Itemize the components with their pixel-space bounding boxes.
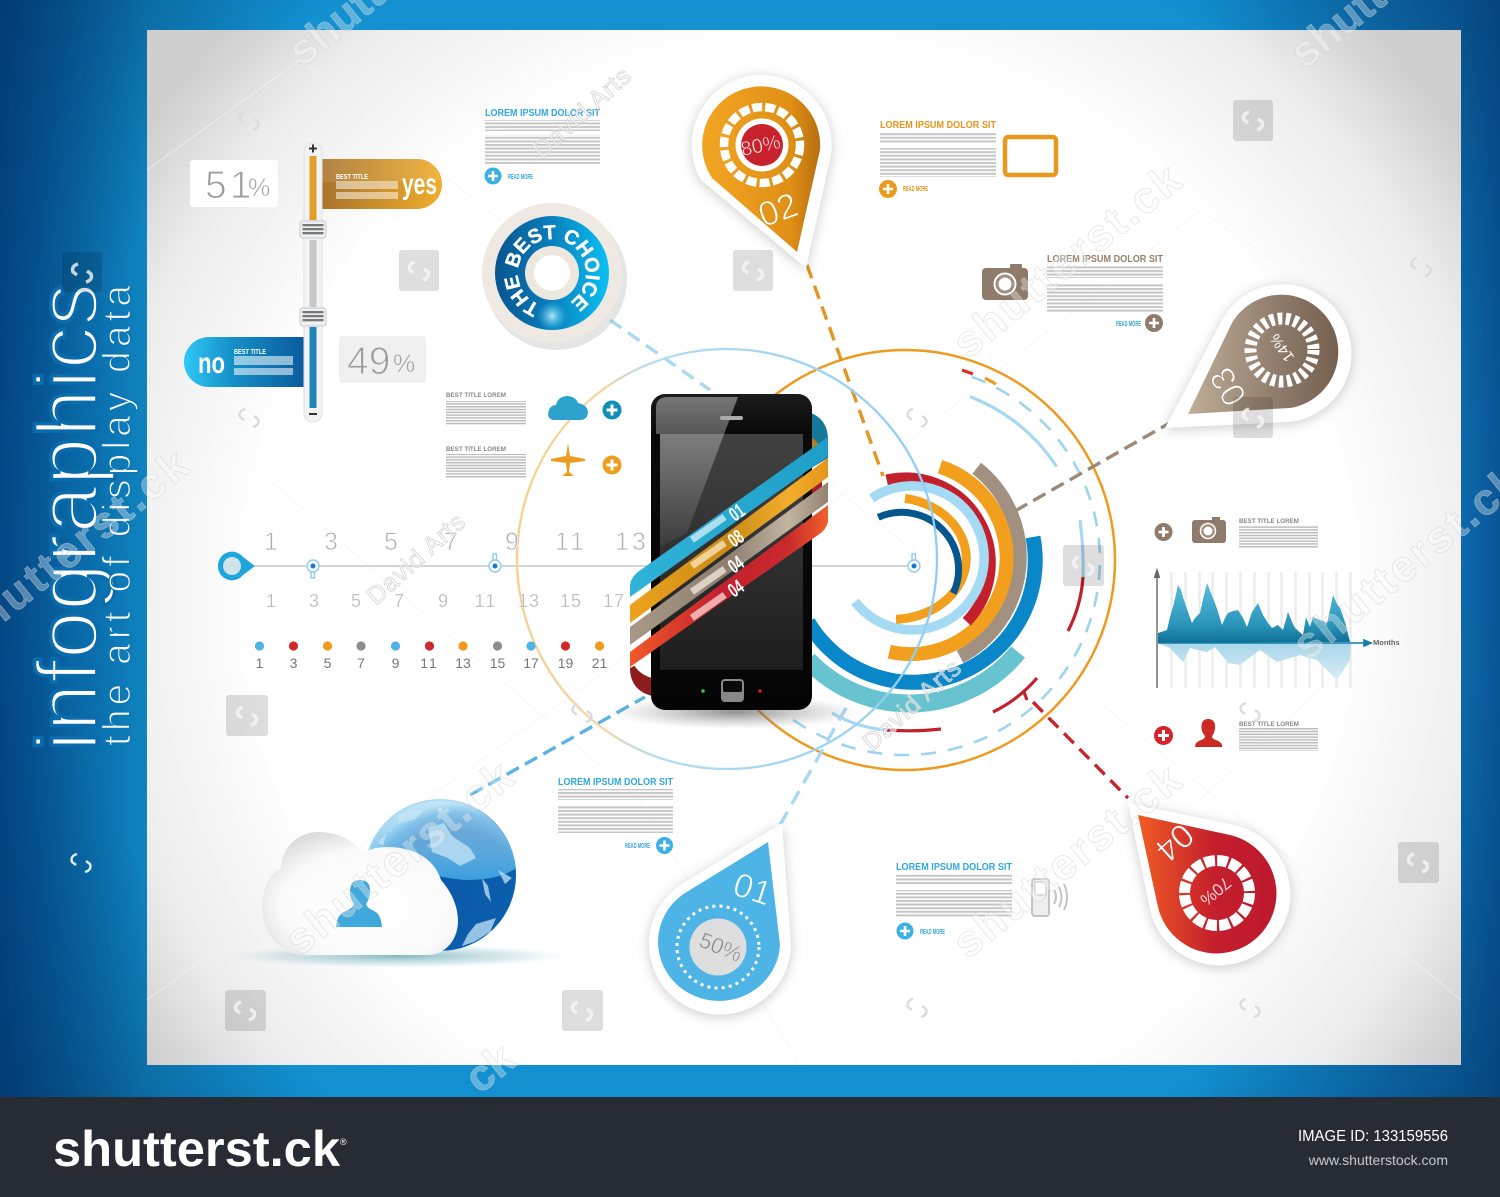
chart y axis — [1154, 570, 1160, 688]
David Arts watermark text: David Arts — [527, 62, 637, 164]
pin body — [658, 842, 780, 1001]
pin number: 02 — [753, 185, 803, 235]
gear ring — [724, 107, 800, 183]
upper scale numbers: 1 — [264, 528, 278, 556]
ground shadow — [226, 944, 570, 968]
slider plus and minus — [309, 144, 317, 415]
plus button — [896, 922, 914, 940]
screen glare — [656, 397, 738, 547]
dots row numbers: 19 — [558, 655, 573, 671]
pin body — [1188, 295, 1338, 414]
phone shadow — [610, 695, 860, 729]
taupe arc — [960, 468, 1020, 657]
dots row numbers: 15 — [490, 655, 505, 671]
small text block with cloud — [446, 393, 622, 425]
chart upper area — [1158, 583, 1350, 643]
text block: top right with tablet: READ MORE — [903, 186, 928, 193]
dots row numbers: 11 — [420, 655, 439, 671]
pin number: 04 — [1148, 815, 1201, 869]
website: www.shutterstock.com — [1308, 1152, 1448, 1168]
dots row numbers: 1 — [256, 655, 264, 671]
lower scale numbers — [266, 591, 625, 611]
dotted ring — [677, 906, 759, 988]
upper scale numbers: 5 — [384, 528, 398, 556]
dashed connector lines — [470, 265, 1175, 825]
pin 01: blue — [649, 823, 791, 1015]
area chart — [1154, 570, 1400, 688]
small text block with cloud: BEST TITLE LOREM — [446, 393, 506, 399]
text block: bottom right with phone — [896, 862, 1067, 940]
ribbon back wraps — [630, 412, 828, 696]
text block: bottom right with phone: READ MORE — [920, 929, 945, 936]
dots row numbers: 5 — [324, 655, 332, 671]
right text block: person — [1154, 719, 1318, 751]
badge blue ring — [495, 216, 609, 330]
ribbon 02: 08 — [724, 526, 748, 552]
value disc — [690, 918, 746, 976]
red arc — [887, 478, 990, 622]
lower scale numbers: 7 — [394, 591, 404, 611]
badge glow — [537, 301, 567, 331]
upper scale numbers: 7 — [444, 528, 458, 556]
upper scale numbers: 11 — [555, 528, 587, 556]
pin halo — [692, 75, 832, 268]
chart grid lines — [1172, 572, 1350, 688]
pin 04: red — [1128, 803, 1290, 965]
footer bar — [0, 1097, 1500, 1197]
dots row numbers: 21 — [592, 655, 607, 671]
chart lower area — [1158, 643, 1351, 680]
shutterstock watermark text: ck — [455, 1034, 525, 1103]
value: 70% — [1196, 873, 1235, 909]
ribbon 04 — [630, 505, 828, 667]
small text block with plane — [446, 443, 622, 478]
text block: bottom centre: READ MORE — [625, 843, 650, 850]
chart x axis — [1158, 640, 1371, 646]
text block: top right with tablet — [879, 120, 1056, 198]
timeline markers — [307, 554, 920, 578]
image id: IMAGE ID: 133159556 — [1298, 1128, 1448, 1145]
globe with cloud — [226, 799, 570, 968]
value: 14% — [1267, 330, 1298, 365]
49 percent box: % — [393, 350, 415, 378]
lower scale numbers: 9 — [438, 591, 448, 611]
plus button — [1145, 314, 1163, 332]
pale left circle — [517, 349, 937, 769]
outline bracket marks — [72, 112, 1430, 1017]
phone screen — [660, 434, 803, 670]
teal arc — [808, 652, 1018, 704]
dots row numbers: 9 — [392, 655, 400, 671]
title — [20, 283, 139, 751]
shutterstock logo: shutterst.ck — [53, 1121, 340, 1177]
chart x axis label: Months — [1373, 638, 1400, 647]
text block: camera: READ MORE — [1116, 321, 1141, 328]
pin halo — [649, 823, 791, 1015]
badge text — [518, 239, 586, 305]
yes label: BEST TITLE — [336, 174, 368, 181]
phone body — [651, 394, 812, 710]
timeline chart — [218, 528, 920, 671]
lower scale numbers: 15 — [560, 591, 582, 611]
51 percent box: 51 — [205, 164, 254, 207]
51 percent box — [190, 160, 278, 207]
plus button — [1154, 726, 1173, 745]
pin number: 01 — [729, 866, 776, 913]
continents — [378, 810, 512, 946]
lower scale numbers: 17 — [603, 591, 625, 611]
right text block: camera — [1154, 517, 1318, 548]
heading: infographics: infographics — [20, 283, 116, 751]
ribbons — [630, 437, 828, 667]
home button — [721, 679, 744, 702]
lower scale numbers: 5 — [351, 591, 361, 611]
burst ring — [1250, 318, 1314, 382]
pin body — [702, 86, 820, 252]
icon: cloud — [548, 396, 588, 420]
globe — [364, 799, 516, 951]
segmented ring — [1184, 860, 1250, 926]
coloured dots row — [255, 641, 604, 651]
ribbon 04: 04 — [724, 576, 749, 602]
timeline axis line — [245, 565, 914, 567]
slider fill segments — [310, 156, 316, 408]
text block: camera — [982, 254, 1163, 332]
slider widget — [184, 143, 442, 422]
pin halo — [1128, 803, 1290, 965]
dots row numbers: 13 — [455, 655, 471, 671]
ribbon 03: 04 — [724, 552, 749, 578]
lower scale numbers: 11 — [475, 591, 497, 611]
no label — [184, 337, 305, 387]
text block: bottom centre — [558, 777, 673, 854]
small text block with plane: BEST TITLE LOREM — [446, 447, 506, 453]
dark blue arc — [878, 512, 959, 593]
value: 80% — [739, 131, 783, 161]
text block: top centre: READ MORE — [508, 174, 533, 181]
slider handles — [300, 221, 326, 326]
blue arc — [808, 537, 1035, 682]
dots row numbers: 7 — [357, 655, 365, 671]
main white panel — [147, 30, 1461, 1065]
pin body — [1138, 815, 1276, 953]
shutterstock watermark text: shutterst.ck — [275, 751, 523, 965]
plus button — [602, 400, 622, 420]
timeline start pin — [218, 552, 255, 580]
badge shadow — [485, 208, 627, 350]
plus button — [879, 180, 897, 198]
indicator lights — [701, 689, 762, 693]
yes label: yes — [402, 168, 437, 201]
lower scale numbers: 3 — [309, 591, 319, 611]
best choice badge — [482, 203, 627, 350]
49 percent box: 49 — [347, 340, 390, 383]
pin 02: orange — [692, 75, 832, 268]
plus button — [1154, 523, 1172, 541]
icon: camera — [982, 264, 1028, 300]
dots row numbers — [256, 655, 607, 671]
text block: top centre — [484, 108, 600, 184]
globe highlight — [370, 800, 516, 880]
ribbon 01: 01 — [725, 500, 749, 526]
value: 50% — [696, 927, 746, 967]
dashed blue circle — [793, 377, 1100, 755]
David Arts watermark text: David Arts — [857, 654, 967, 756]
inner ring — [736, 118, 788, 172]
lower scale numbers: 13 — [518, 591, 540, 611]
subheading: the art of display data: the art of display data — [96, 285, 139, 746]
smartphone — [651, 394, 812, 710]
icon: mobile signal — [1032, 879, 1067, 916]
49 percent box — [339, 336, 426, 383]
bracket marks in squares — [73, 112, 1427, 1020]
pin halo — [1165, 284, 1351, 428]
upper scale numbers: 3 — [324, 528, 338, 556]
upper scale numbers: 9 — [505, 528, 519, 556]
text block: top centre: LOREM IPSUM DOLOR SIT — [485, 108, 600, 119]
dots row numbers: 17 — [523, 655, 539, 671]
dots row numbers: 3 — [290, 655, 298, 671]
icon: plane — [551, 443, 585, 476]
outer orange circle — [695, 350, 1115, 770]
David Arts watermark text: David Arts — [361, 508, 471, 610]
cloud — [262, 832, 458, 955]
text block: top right with tablet: LOREM IPSUM DOLOR SIT — [880, 120, 996, 131]
shutterstock watermark text: shutterst.ck — [943, 754, 1191, 968]
light blue arc — [855, 486, 984, 630]
yes label — [322, 159, 442, 209]
no label: BEST TITLE — [234, 349, 266, 356]
plus button — [602, 456, 622, 474]
lower scale numbers: 1 — [266, 591, 276, 611]
badge cream disc — [482, 203, 622, 343]
51 percent box: % — [248, 174, 270, 202]
badge centre hole — [525, 246, 579, 300]
text block: bottom right with phone: LOREM IPSUM DOLOR SIT — [896, 862, 1012, 873]
icon: small camera — [1192, 517, 1226, 543]
plus button — [656, 837, 673, 854]
pin number: 03 — [1203, 361, 1254, 412]
David Arts watermark text — [361, 62, 967, 756]
icon: person in cloud — [336, 880, 382, 927]
grey square marks — [62, 100, 1439, 1031]
value disc — [741, 124, 783, 166]
text block: bottom centre: LOREM IPSUM DOLOR SIT — [558, 777, 673, 788]
ribbon 03 — [630, 482, 828, 645]
text block: camera: LOREM IPSUM DOLOR SIT — [1047, 254, 1163, 265]
icon: person — [1195, 719, 1222, 747]
upper scale numbers — [264, 528, 649, 556]
speaker — [720, 416, 743, 420]
plus button — [484, 168, 502, 184]
large orange arc — [889, 467, 1007, 654]
upper scale numbers: 13 — [615, 528, 649, 556]
shutterstock watermark text: shutterst.ck — [943, 154, 1191, 368]
best choice badge: THE BEST CHOICE — [504, 224, 600, 318]
right text block: person: BEST TITLE LOREM — [1239, 722, 1299, 728]
icon: tablet — [1005, 137, 1056, 175]
pin 03: taupe — [1165, 284, 1351, 428]
radial arc chart — [808, 467, 1035, 704]
ribbon 02 — [630, 458, 828, 623]
ribbon 01 — [630, 437, 828, 597]
no label: no — [198, 347, 225, 380]
logo registered mark: ® — [340, 1137, 347, 1147]
slider track — [304, 143, 322, 422]
right text block: camera: BEST TITLE LOREM — [1239, 519, 1299, 525]
small orange arc — [896, 498, 966, 619]
small outer arcs — [832, 370, 1083, 731]
